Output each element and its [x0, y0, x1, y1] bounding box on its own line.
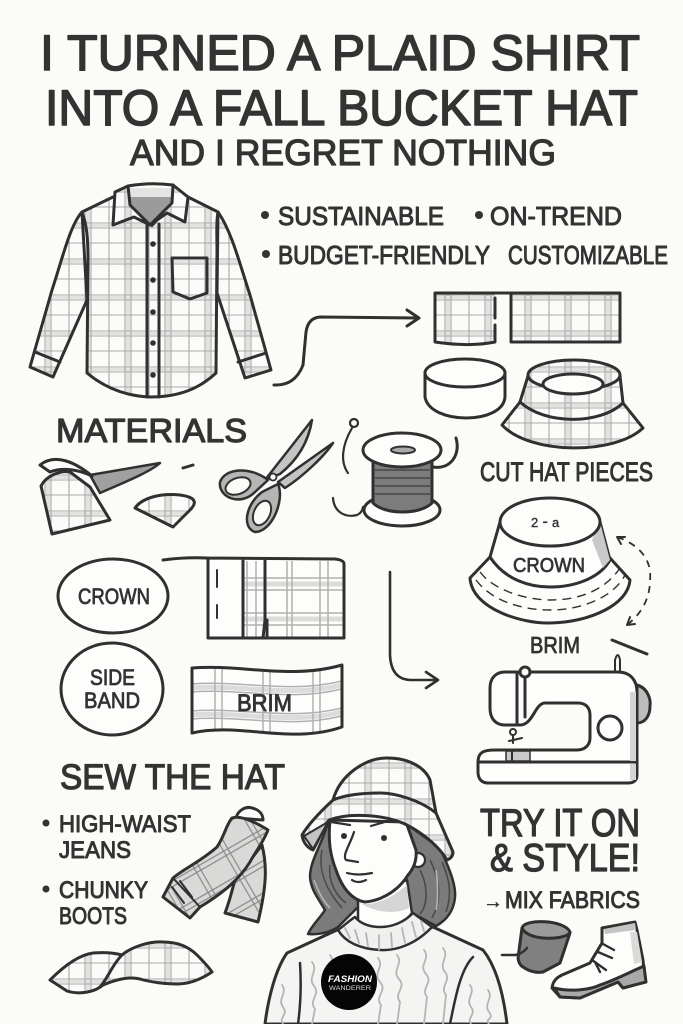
- dashed rotation arrow: [617, 537, 650, 625]
- label: brim: BRIM: [530, 632, 580, 658]
- hair: [308, 822, 455, 934]
- outfit tips list: JEANS: [59, 837, 131, 864]
- sweater: [265, 927, 507, 1024]
- icon: scissors: [220, 420, 333, 532]
- icon: fabric being cut with shears: [40, 459, 194, 534]
- icon: bucket hat with crown and brim: CROWN: [513, 555, 585, 577]
- icon: fabric roll: [502, 922, 570, 972]
- title: INTO A FALL BUCKET HAT: [45, 80, 638, 136]
- plaid fabric swatch: [50, 942, 212, 993]
- icon: plaid shirt: [30, 184, 271, 397]
- icon: chunky boot: [552, 922, 646, 998]
- plain cylinder band: [425, 359, 505, 418]
- heading: try it on and style: [480, 802, 640, 880]
- icon: thread spool: [333, 419, 457, 526]
- heading: try it on and style: TRY IT ON: [480, 802, 640, 845]
- heading: sew the hat: SEW THE HAT: [60, 758, 285, 797]
- crown pattern oval: [58, 559, 168, 633]
- illustration: woman in bucket hat: [265, 758, 507, 1024]
- title: AND I REGRET NOTHING: [130, 132, 556, 173]
- logo badge: [321, 954, 377, 1010]
- icon: bucket hat with crown and brim: 2 ⁃ a: [531, 515, 560, 530]
- side band pattern circle: [61, 643, 163, 735]
- brim fabric piece: BRIM: [237, 690, 292, 717]
- benefits list: ON-TREND: [490, 201, 622, 231]
- sweater collar: [338, 913, 432, 950]
- title: [40, 25, 640, 173]
- icon: sewing machine: [478, 640, 650, 783]
- side band pattern circle: SIDE: [90, 665, 135, 690]
- benefits list: BUDGET-FRIENDLY: [278, 240, 490, 270]
- title: I TURNED A PLAID SHIRT: [40, 25, 640, 81]
- crown pattern oval: CROWN: [78, 584, 150, 609]
- icon: plaid socks in hand: [163, 807, 268, 922]
- logo badge: WANDERER: [329, 985, 371, 992]
- benefits list: SUSTAINABLE: [278, 201, 444, 231]
- bucket hat on head: [302, 758, 453, 860]
- logo badge: FASHION: [328, 974, 373, 985]
- tip: mix fabrics: MIX FABRICS: [505, 887, 640, 914]
- outfit tips list: HIGH-WAIST: [59, 811, 191, 838]
- plaid hat assembly: [502, 360, 643, 448]
- fabric strips: [435, 293, 620, 345]
- brim fabric piece: [192, 660, 342, 740]
- neck and face: [329, 820, 425, 930]
- outfit tips list: [42, 811, 191, 930]
- arrow: shirt to cut pieces: [274, 310, 419, 385]
- outfit tips list: CHUNKY: [59, 877, 148, 904]
- tip: mix fabrics: →: [483, 891, 503, 913]
- arrow: pieces to sewing machine: [390, 572, 438, 688]
- outfit tips list: BOOTS: [59, 903, 127, 930]
- icon: bucket hat with crown and brim: [470, 498, 630, 623]
- benefits list: [261, 201, 668, 270]
- heading: try it on and style: & STYLE!: [490, 837, 640, 880]
- heading: materials: MATERIALS: [56, 412, 247, 449]
- folded fabric panel: [163, 558, 344, 638]
- side band pattern circle: BAND: [84, 688, 140, 713]
